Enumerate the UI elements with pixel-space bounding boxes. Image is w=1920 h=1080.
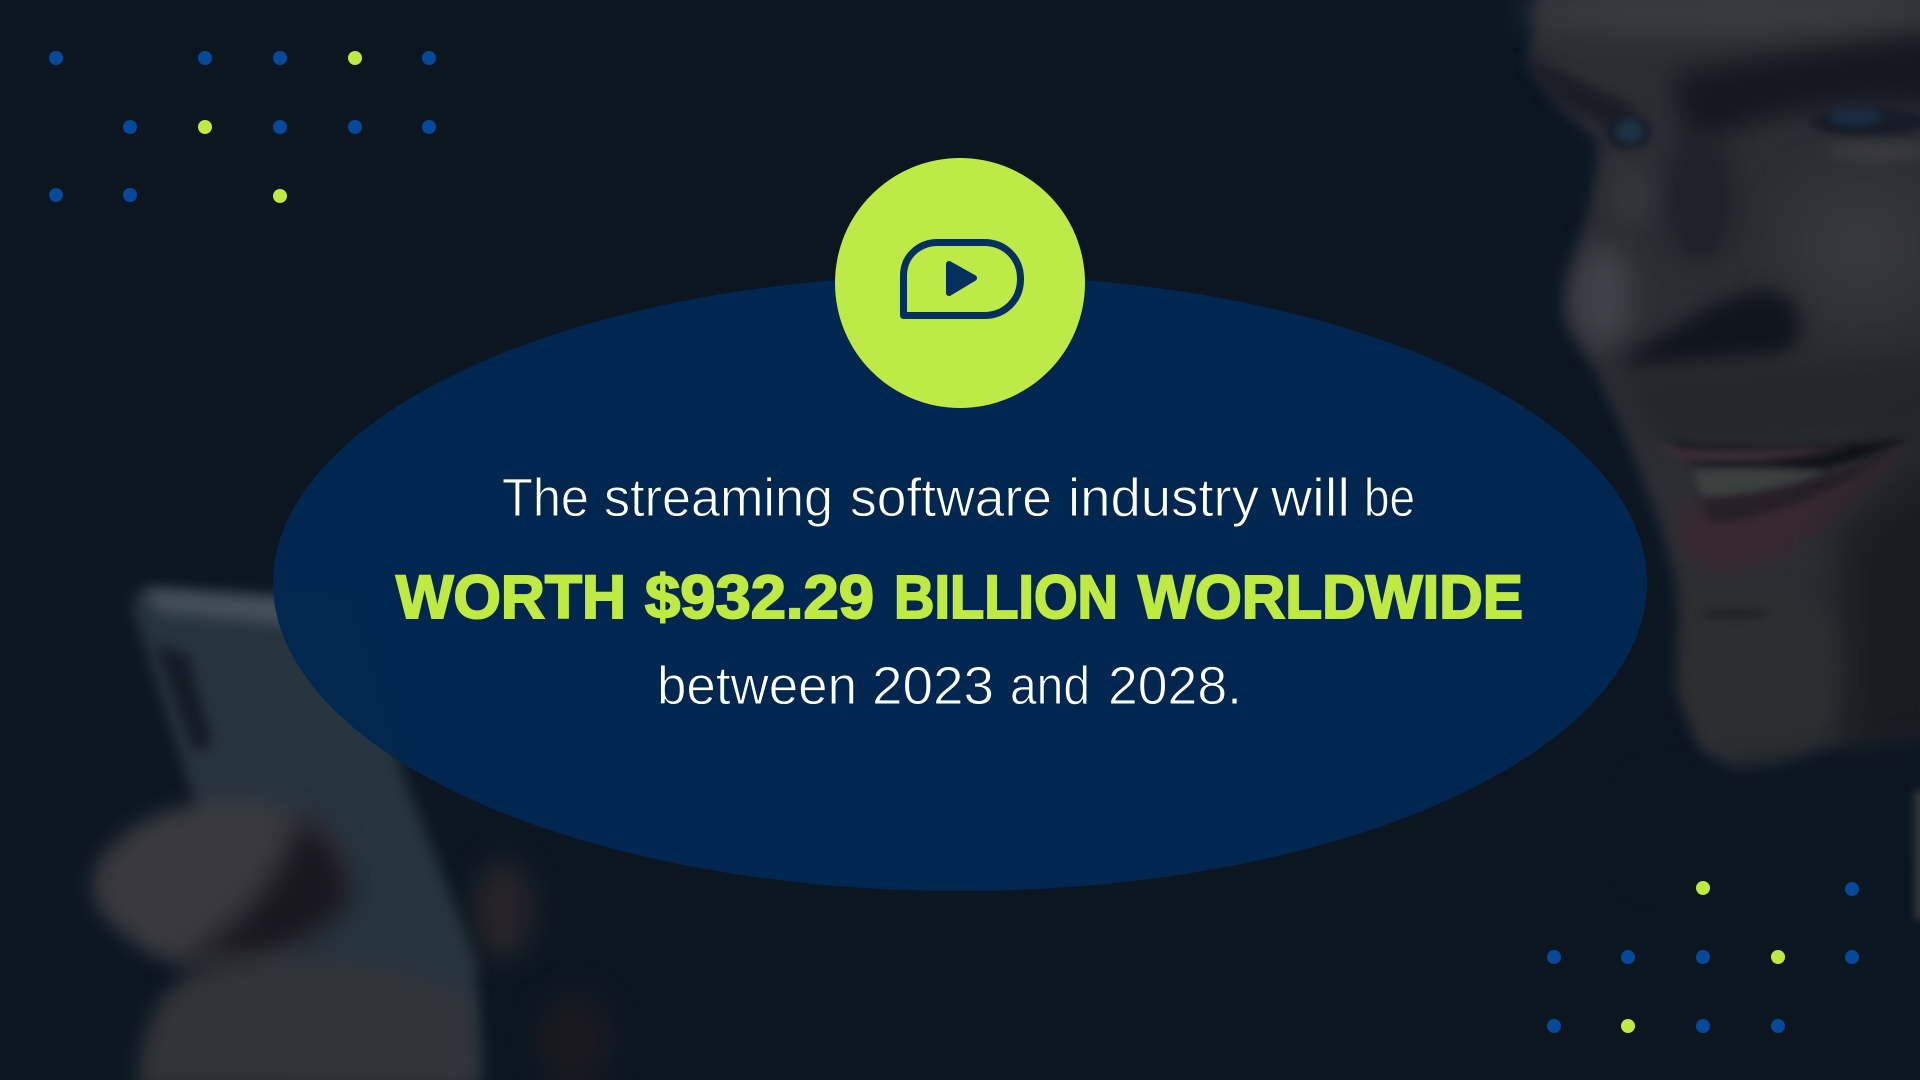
text: intro line: be [1364,468,1415,528]
text: highlighted figure: WORTH [396,563,626,631]
text: highlighted figure: $932.29 [645,563,874,631]
dot grid: bottom right [1547,881,1859,1033]
text: highlighted figure: WORLDWIDE [1138,563,1523,631]
text: highlighted figure [396,563,1523,631]
text: closing line: and [1010,656,1090,716]
text: closing line [657,656,1242,716]
photo: blurred hand holding phone [92,587,613,1080]
text: intro line [502,468,1415,528]
text: intro line: will [1270,468,1350,528]
dot grid: top left [49,51,436,203]
text: intro line: streaming [604,468,833,528]
icon: play bubble in lime circle [835,158,1085,408]
text: intro line: industry [1068,468,1259,528]
text: closing line: between [657,656,857,716]
photo: blurred man's face [1520,0,1920,920]
text: closing line: 2028. [1108,656,1242,716]
text: closing line: 2023 [872,656,994,716]
panel: navy ellipse [273,275,1647,891]
text: intro line: The [502,468,589,528]
text: intro line: software [850,468,1052,528]
text: highlighted figure: BILLION [894,563,1118,631]
